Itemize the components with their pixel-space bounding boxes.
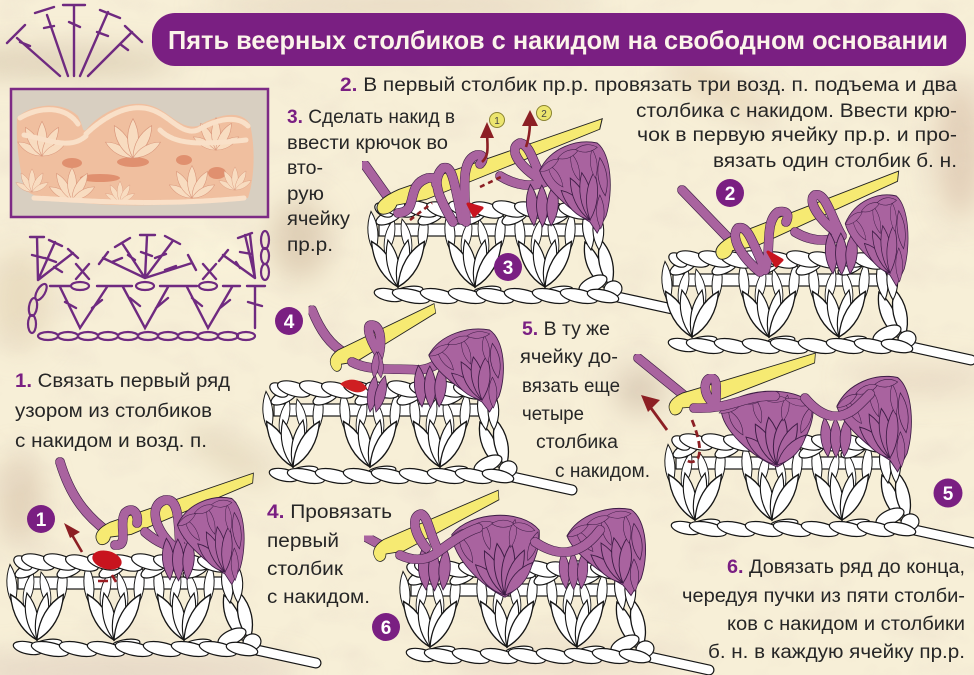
text: step 2: 2. В первый столбик пр.р. провязать три возд. п. подъема и два bbox=[340, 75, 904, 96]
text: step 4: столбик bbox=[267, 559, 344, 580]
text: step 5: с накидом. bbox=[555, 461, 650, 482]
badge 5: 5 bbox=[943, 484, 954, 505]
text: step 6: 6. Довязать ряд до конца, bbox=[727, 557, 956, 578]
badge 6: 6 bbox=[381, 618, 391, 639]
illustration 6: row continuing bbox=[366, 486, 709, 670]
photo of crocheted sample bbox=[11, 89, 268, 217]
text: step 4: с накидом. bbox=[267, 587, 370, 608]
title bar: Пять веерных столбиков с накидом на свободном основании bbox=[168, 25, 948, 55]
text: step 2: вязать один столбик б. н. bbox=[713, 151, 957, 172]
illustration 1: first stitch with hook bbox=[5, 462, 316, 663]
text: step 5: 5. В ту же bbox=[522, 319, 608, 340]
illustration 2: first single crochet bbox=[660, 166, 971, 360]
title bar bbox=[152, 13, 966, 66]
text: step 5: столбика bbox=[536, 432, 618, 453]
illustration 5: completed fan bbox=[638, 348, 974, 543]
text: step 4: первый bbox=[267, 531, 339, 552]
text: step 1: узором из столбиков bbox=[15, 401, 212, 422]
text: step 6: б. н. в каждую ячейку пр.р. bbox=[708, 642, 965, 663]
illustration 4: first double crochet bbox=[261, 299, 572, 490]
text: step 2: чок в первую ячейку пр.р. и про- bbox=[637, 125, 957, 146]
text: step 3: ввести крючок во bbox=[287, 133, 448, 154]
badge 6 bbox=[372, 613, 400, 641]
badge 1 bbox=[27, 505, 55, 533]
badge 5 bbox=[934, 478, 962, 508]
text: step 3: вто- bbox=[287, 158, 323, 179]
text: step 1: 1. Связать первый ряд bbox=[15, 371, 217, 392]
badge 3: 3 bbox=[503, 258, 513, 279]
illustration 3: yarn over and arrows: 2 bbox=[541, 109, 547, 120]
text: step 6: ков с накидом и столбики bbox=[727, 614, 965, 635]
badge 4: 4 bbox=[284, 312, 295, 333]
badge 4 bbox=[275, 307, 303, 335]
diagram: pattern chart bbox=[28, 231, 269, 340]
text: step 2: столбика с накидом. Ввести крю- bbox=[636, 101, 957, 122]
text: step 3: пр.р. bbox=[287, 235, 333, 256]
text: step 5: вязать еще bbox=[522, 376, 620, 397]
text: step 1: с накидом и возд. п. bbox=[15, 431, 207, 452]
illustration 3: yarn over and arrows: 1 bbox=[494, 116, 500, 127]
badge 2: 2 bbox=[725, 184, 735, 205]
badge 1: 1 bbox=[36, 510, 47, 531]
text: step 6: чередуя пучки из пяти столби- bbox=[682, 586, 965, 607]
badge 2 bbox=[716, 179, 744, 207]
text: step 4: 4. Провязать bbox=[267, 502, 382, 523]
text: step 3: ячейку bbox=[287, 209, 351, 230]
badge 3 bbox=[494, 253, 522, 281]
illustration 3: yarn over and arrows bbox=[365, 106, 677, 310]
icon: chart symbol of five fan stitches bbox=[7, 5, 142, 76]
text: step 3: 3. Сделать накид в bbox=[287, 107, 455, 128]
text: step 3: рую bbox=[287, 184, 324, 205]
text: step 5: четыре bbox=[522, 404, 584, 425]
text: step 5: ячейку до- bbox=[520, 347, 618, 368]
